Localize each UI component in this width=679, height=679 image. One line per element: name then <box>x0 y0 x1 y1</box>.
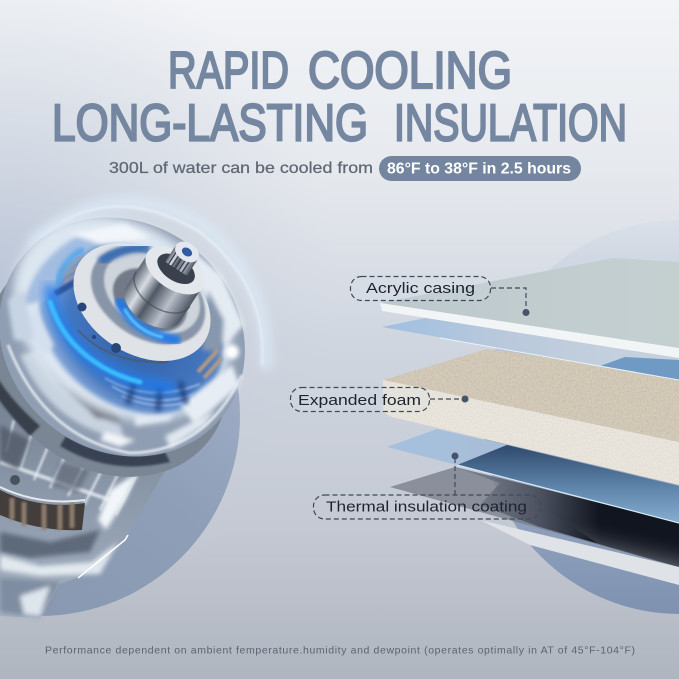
motor shaft <box>115 226 220 339</box>
callout: expanded foam <box>290 388 468 412</box>
callout: expanded foam: Expanded foam <box>298 392 421 409</box>
layered insulation stack <box>380 258 679 585</box>
copper coil <box>0 487 85 530</box>
footnote: Performance dependent on ambient femperature.humidity and dewpoint (operates optimally in AT of 45°F-104°F) <box>45 644 635 656</box>
lower glass body <box>0 370 170 618</box>
acrylic casing panel <box>380 258 679 358</box>
bolt <box>10 475 20 485</box>
lower blue sheet <box>387 429 679 523</box>
copper coils <box>55 256 222 378</box>
motor illustration <box>0 168 293 618</box>
title word LONG-LASTING: LONG-LASTING <box>52 94 368 152</box>
callout: acrylic casing <box>350 276 530 316</box>
glowing blue arc outer <box>50 250 170 388</box>
expanded foam panel <box>383 349 679 485</box>
cooling fins <box>0 420 140 515</box>
title word COOLING: COOLING <box>308 42 512 100</box>
title word RAPID: RAPID <box>168 42 289 100</box>
highlighted pill: 86°F to 38°F in 2.5 hours <box>387 160 571 178</box>
coil face <box>5 207 257 449</box>
glowing blue arc inner <box>120 302 176 340</box>
drum upper pale glass <box>0 173 272 463</box>
decorative circle right <box>483 220 679 614</box>
upper blue sheet <box>382 318 679 380</box>
highlighted pill <box>379 156 581 181</box>
steel band <box>0 200 274 524</box>
title <box>52 42 627 152</box>
bolts on flange <box>78 302 121 353</box>
silver flange ring <box>52 219 232 385</box>
subtitle <box>109 156 581 181</box>
callout: thermal insulation coating: Thermal insulation coating <box>326 498 527 516</box>
callout: thermal insulation coating <box>314 452 540 519</box>
callout: acrylic casing: Acrylic casing <box>366 280 475 297</box>
decorative circle left <box>42 389 240 616</box>
subtitle text: 300L of water can be cooled from <box>109 160 373 177</box>
foam top surface <box>383 349 679 442</box>
outer glow ring <box>30 202 266 370</box>
foam side edge <box>383 380 679 485</box>
dark coating sheet <box>390 467 679 585</box>
drum lower wall <box>20 350 215 448</box>
glass drum <box>0 168 293 506</box>
